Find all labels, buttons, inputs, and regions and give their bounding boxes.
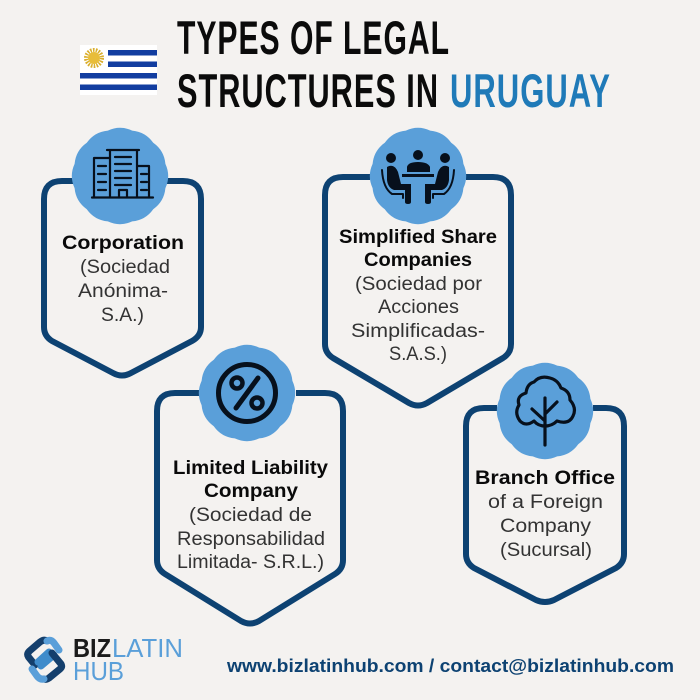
text: logo wordmark: HUB <box>73 656 124 686</box>
icon: percent <box>218 364 276 422</box>
text: corporation: Corporation <box>62 233 184 254</box>
text: branch office: Branch Office <box>475 468 615 489</box>
title: TYPES OF LEGAL <box>177 11 450 64</box>
logo: Biz Latin Hub <box>28 633 183 686</box>
badge: tree icon <box>497 363 593 459</box>
text: branch office <box>475 468 615 561</box>
panel: corporation <box>44 128 201 376</box>
text: corporation: S.A.) <box>101 305 144 326</box>
panel: simplified share companies <box>325 128 511 406</box>
text: limited liability company <box>173 458 328 573</box>
text: logo wordmark: LATIN <box>112 633 183 663</box>
panel: branch office <box>466 363 624 602</box>
icon: office buildings <box>92 150 153 198</box>
icon: people at table <box>382 150 454 204</box>
icon: Uruguay flag <box>80 45 157 95</box>
title: URUGUAY <box>450 64 611 117</box>
text: corporation <box>62 233 184 326</box>
icon: logo mark <box>28 640 62 679</box>
text: simplified share companies: (Sociedad por <box>355 274 483 295</box>
text: simplified share companies: Simplificadas- <box>351 321 485 342</box>
text: limited liability company: Responsabilidad <box>177 529 325 550</box>
text: logo wordmark <box>73 633 183 686</box>
text: limited liability company: Company <box>204 481 298 502</box>
text: simplified share companies: Acciones <box>378 297 459 318</box>
text: simplified share companies: S.A.S.) <box>389 344 447 365</box>
text: limited liability company: Limitada- S.R.L.) <box>177 552 324 573</box>
panel: limited liability company <box>157 345 343 624</box>
text: limited liability company: (Sociedad de <box>189 505 312 526</box>
badge: percent icon <box>199 345 295 441</box>
text: simplified share companies: Simplified Share <box>339 227 497 248</box>
badge: corporation icon <box>72 128 168 224</box>
footer contact text: www.bizlatinhub.com / contact@bizlatinhub.com <box>226 656 674 676</box>
text: corporation: (Sociedad <box>80 257 170 278</box>
text: branch office: of a Foreign <box>488 492 603 513</box>
badge: meeting icon <box>370 128 466 224</box>
text: logo wordmark: BIZ <box>73 633 111 663</box>
text: limited liability company: Limited Liability <box>173 458 328 479</box>
text: corporation: Anónima- <box>78 281 168 302</box>
text: simplified share companies <box>339 227 497 365</box>
text: simplified share companies: Companies <box>364 250 472 271</box>
title <box>177 11 611 117</box>
text: branch office: (Sucursal) <box>500 540 592 561</box>
title: STRUCTURES IN <box>177 64 439 117</box>
text: branch office: Company <box>500 516 592 537</box>
icon: tree <box>517 377 574 445</box>
